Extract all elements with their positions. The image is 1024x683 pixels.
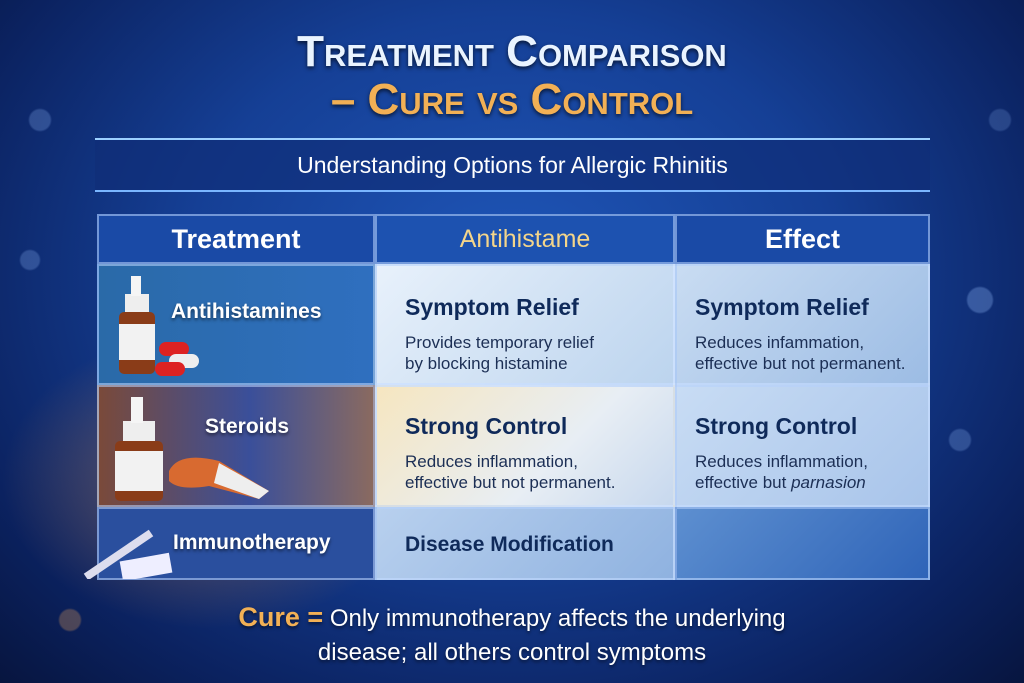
subtitle band: Understanding Options for Allergic Rhinitis <box>297 152 728 178</box>
header: Antihistame <box>375 214 675 264</box>
footer conclusion: Cure = Only immunotherapy affects the underlying <box>238 602 786 632</box>
row label: Antihistamines <box>97 264 375 385</box>
cell: strong control 1: effective but not permanent. <box>405 473 615 492</box>
header: Effect: Effect <box>765 224 840 254</box>
cell: symptom relief 1: by blocking histamine <box>405 354 568 373</box>
background glow <box>0 330 420 630</box>
cell: strong control 2: Strong Control <box>695 413 857 439</box>
cell: symptom relief 1 <box>375 264 675 385</box>
footer conclusion <box>238 602 786 668</box>
cell: symptom relief 2: Symptom Relief <box>695 294 869 320</box>
row label: Antihistamines: Antihistamines <box>171 300 322 323</box>
cell: symptom relief 2: Reduces infammation, <box>695 333 864 352</box>
cell: symptom relief 2 <box>675 264 930 385</box>
cell: strong control 1 <box>375 385 675 507</box>
title: Treatment Comparison <box>297 27 727 76</box>
cell: strong control 1: Strong Control <box>405 413 567 439</box>
icon: bottle and inhaler <box>115 397 269 501</box>
title: – Cure vs Control <box>331 75 693 124</box>
table <box>84 214 930 580</box>
header: Treatment: Treatment <box>171 224 301 254</box>
subtitle band <box>95 138 930 192</box>
row label: Steroids <box>97 385 375 507</box>
cell: symptom relief 2: effective but not permanent. <box>695 354 905 373</box>
header: Treatment <box>97 214 375 264</box>
cell: disease modification <box>375 507 675 580</box>
row label: Immunotherapy: Immunotherapy <box>173 531 331 554</box>
cell: disease modification: Disease Modification <box>405 533 614 556</box>
cell: strong control 2 <box>675 385 930 507</box>
header: Antihistame: Antihistame <box>460 225 590 253</box>
cell: strong control 2: Reduces inflammation, <box>695 452 868 471</box>
cell: empty <box>675 507 930 580</box>
icon: syringe <box>84 530 172 579</box>
title <box>295 27 728 124</box>
footer conclusion: disease; all others control symptoms <box>318 639 706 666</box>
cell: symptom relief 1: Symptom Relief <box>405 294 579 320</box>
row label: Immunotherapy <box>97 507 375 580</box>
icon: bottle and pills <box>119 276 199 376</box>
row label: Steroids: Steroids <box>205 415 289 438</box>
cell: strong control 1: Reduces inflammation, <box>405 452 578 471</box>
cell: strong control 2: effective but parnasion <box>695 473 866 492</box>
header: Effect <box>675 214 930 264</box>
cell: symptom relief 1: Provides temporary relief <box>405 333 594 352</box>
